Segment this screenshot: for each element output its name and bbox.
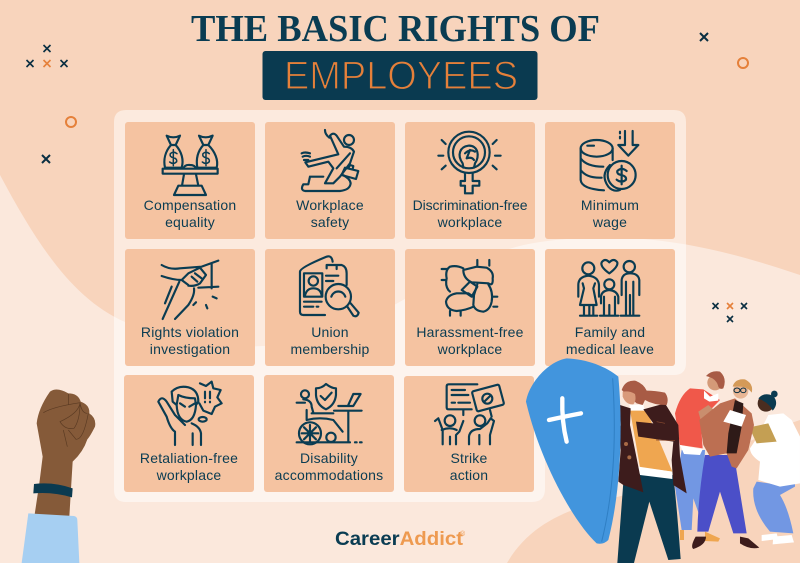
label: workplace [437,341,502,357]
label: workplace [156,467,221,483]
label: investigation [150,341,230,357]
label: Rights violation [141,324,239,340]
icon: female symbol with fist [438,132,501,193]
illustration: team behind shield [617,371,800,563]
card: harassment-free workplace [405,249,535,366]
decoration: cross left [42,155,50,163]
label: membership [290,341,370,357]
label: Workplace [296,197,364,213]
label: Minimum [581,197,639,213]
label: Compensation [144,197,236,213]
label: equality [165,214,215,230]
shield [526,358,621,544]
decoration: ring left [66,117,76,127]
card: union membership [265,249,395,366]
label: Retaliation-free [140,450,238,466]
label: Harassment-free [416,324,524,340]
decoration: cross top right [700,33,708,41]
label: accommodations [275,467,383,483]
title: THE BASIC RIGHTS OF [191,8,600,50]
label: Discrimination-free [413,197,527,213]
card: retaliation-free workplace [124,375,254,492]
card: discrimination-free workplace [405,122,535,239]
label: Family and [575,324,645,340]
card: rights violation investigation [125,249,255,366]
person: woman in white [749,391,800,544]
icon: slipping person [302,130,358,191]
icon: wheelchair at desk [297,384,362,444]
card: strike action [404,376,534,492]
card: compensation equality [125,122,255,239]
label: Disability [300,450,358,466]
heading banner: employees: EMPLOYEES [284,54,518,98]
icon: money bags on scale [163,136,218,195]
icon: protesters with signs [435,384,504,444]
icon: family [578,260,639,316]
person: man in brown jacket [692,379,759,549]
illustration: raised fist [22,390,95,563]
person: woman holding shield [617,381,687,563]
label: Strike [450,450,488,466]
card: minimum wage [545,122,675,239]
icon: coins and down arrow [581,131,638,191]
icon: angry person [158,382,222,445]
label: workplace [437,214,502,230]
logo trademark: ® [460,530,466,538]
label: safety [311,214,349,230]
icon: interlocked hands [442,260,497,316]
label: action [450,467,488,483]
card: disability accommodations [264,375,394,492]
person: man in red [675,371,725,542]
panel: rights grid [114,110,686,502]
label: Union [311,324,349,340]
label: medical leave [566,341,654,357]
decoration: crosses top left [26,45,68,67]
card: family and medical leave [545,249,675,366]
decoration: ring right [738,58,748,68]
icon: gripped arm [162,261,218,319]
card: workplace safety [265,122,395,239]
logo: CareerAddict: CareerAddict [335,529,464,550]
label: wage [592,214,627,230]
icon: id card and magnifier [300,256,359,316]
decoration: crosses right [712,303,747,322]
